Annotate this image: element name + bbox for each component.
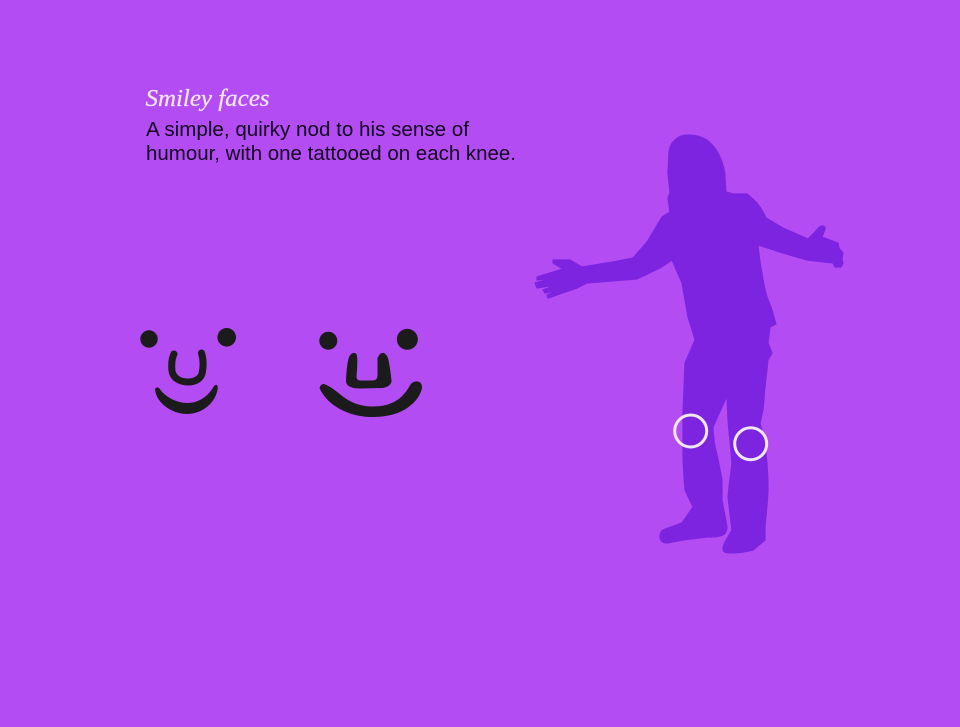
description text: humour, with one tattooed on each knee. [146,143,516,165]
description text: A simple, quirky nod to his sense of [146,119,469,141]
marker: left knee [675,415,707,447]
description text [146,119,516,165]
tattoo: left knee smiley [140,328,236,414]
silhouette of man [535,135,843,553]
tattoo: right knee smiley [319,329,422,417]
marker: right knee [735,428,767,460]
heading: Smiley faces [146,86,270,112]
